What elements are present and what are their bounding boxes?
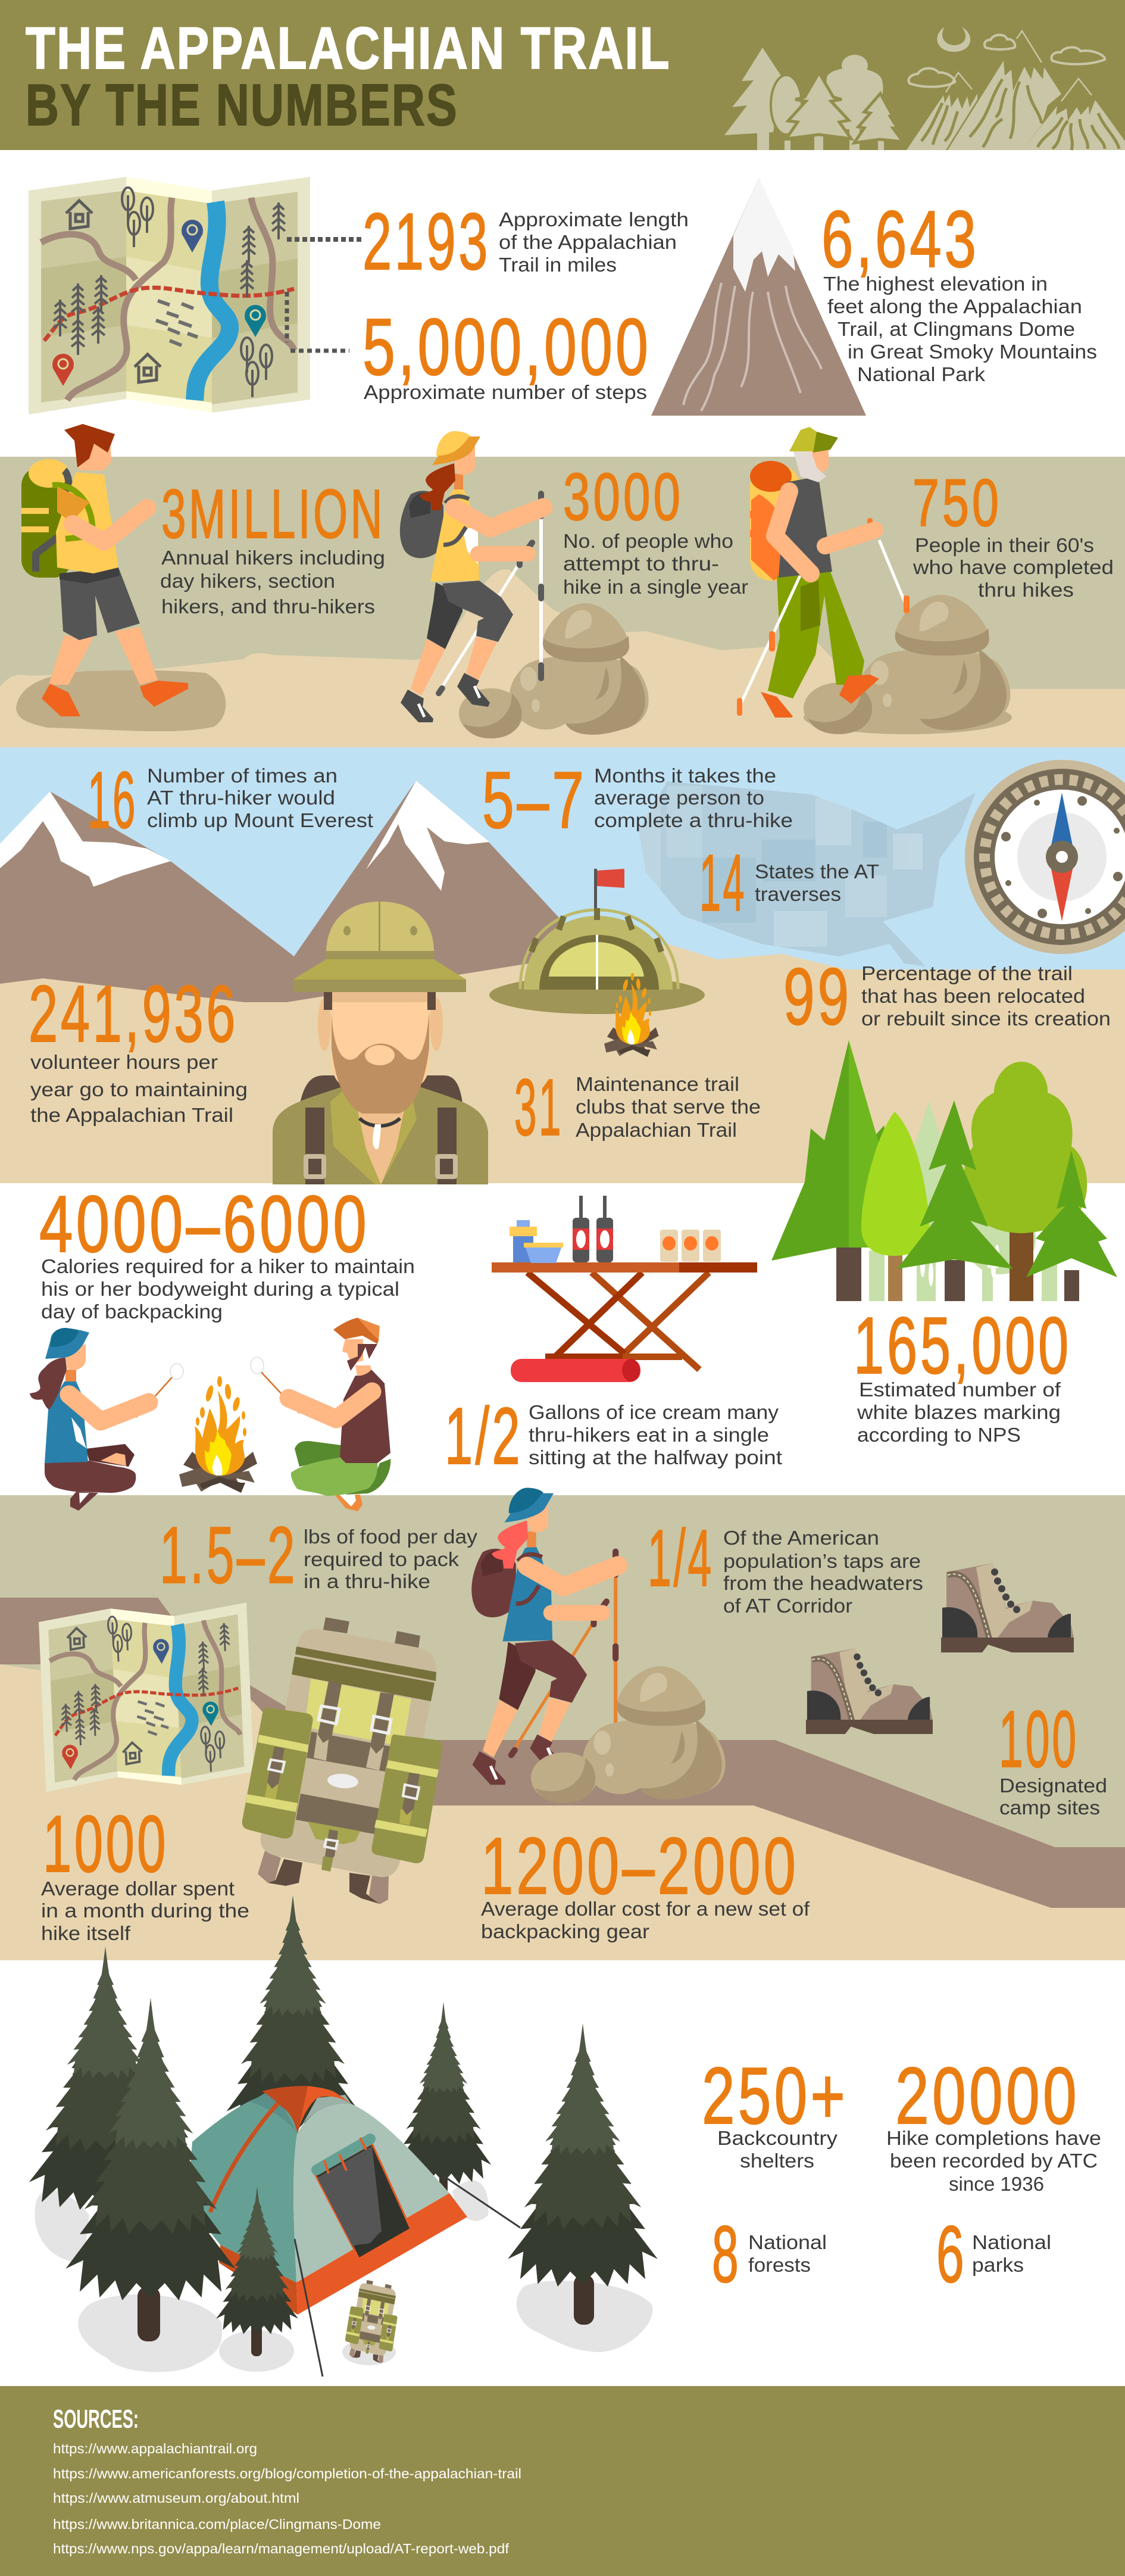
description: Maintenance trail (576, 1073, 739, 1095)
stat: 99 percent (783, 952, 1111, 1041)
description: Number of times an (147, 765, 338, 787)
description: hike in a single year (563, 576, 748, 598)
description: in Great Smoky Mountains (848, 341, 1097, 363)
description (30, 1051, 248, 1126)
description: Estimated number of (859, 1379, 1061, 1401)
description: the Appalachian Trail (30, 1104, 233, 1126)
description: Approximate length (499, 208, 689, 230)
sources list: https://www.britannica.com/place/Clingmans-Dome (53, 2516, 381, 2532)
stat: 1000 dollars per month (41, 1799, 249, 1944)
stat: 14 states (699, 838, 879, 928)
stat: 6 national parks (936, 2209, 1051, 2299)
description: Hike completions have (886, 2127, 1101, 2149)
description (857, 1379, 1061, 1446)
description: volunteer hours per (30, 1051, 218, 1073)
description: Percentage of the trail (861, 962, 1073, 984)
number: 241,936 (29, 969, 238, 1059)
description: since 1936 (949, 2173, 1044, 2195)
rock pile (531, 1666, 726, 1803)
description: day of backpacking (41, 1301, 223, 1323)
description: hike itself (41, 1922, 131, 1944)
sand ground (0, 569, 1125, 747)
number: 750 (912, 466, 1002, 540)
panel: food and calories (39, 1179, 1071, 1481)
rock pile: middle (459, 603, 649, 738)
description: of the Appalachian (499, 231, 677, 253)
figure: older hiker (737, 427, 910, 718)
description: in a thru-hike (304, 1570, 430, 1592)
stat: 20000 completions (886, 2051, 1101, 2195)
description: Trail, at Clingmans Dome (838, 318, 1075, 340)
sources heading: SOURCES: (53, 2405, 139, 2434)
number: 6,643 (821, 194, 979, 284)
description: shelters (740, 2150, 814, 2172)
icon: folded trail map (29, 177, 310, 414)
figure group: marshmallow campers (30, 1318, 390, 1511)
number: 4000–6000 (39, 1179, 370, 1269)
description: National Park (857, 363, 986, 385)
connector: map to 2193 (287, 237, 362, 242)
panel: mountains and camp scene (0, 747, 1125, 1301)
description: Trail in miles (499, 254, 617, 276)
description: feet along the Appalachian (827, 295, 1082, 317)
description: year go to maintaining (30, 1078, 248, 1100)
description: complete a thru-hike (594, 809, 793, 831)
number: 16 (88, 755, 138, 845)
stat: 16 Everests (88, 755, 373, 845)
number: 1.5–2 (160, 1510, 298, 1600)
description (481, 1898, 810, 1942)
figure: walking man (21, 424, 188, 716)
description: parks (972, 2254, 1024, 2276)
description (41, 1255, 415, 1323)
description: who have completed (912, 556, 1114, 578)
description: Of the American (723, 1527, 879, 1549)
description (723, 1527, 923, 1617)
number: 6 (936, 2209, 967, 2299)
description: sitting at the halfway point (529, 1446, 782, 1468)
description: No. of people who (563, 530, 733, 552)
description: clubs that serve the (576, 1096, 761, 1118)
description: hikers, and thru-hikers (161, 595, 375, 618)
description: People in their 60's (915, 534, 1094, 556)
figure: seated man (251, 1318, 390, 1511)
description (147, 765, 373, 831)
figure: seated woman (30, 1328, 183, 1511)
title (26, 15, 671, 138)
stat: 5-7 months (482, 755, 793, 845)
description: been recorded by ATC (890, 2150, 1098, 2172)
icon: campfire (179, 1376, 257, 1493)
panel: length and elevation (29, 177, 1097, 416)
icon: snow-capped mountain (651, 178, 866, 416)
description: or rebuilt since its creation (861, 1008, 1111, 1030)
description: Average dollar spent (41, 1878, 235, 1900)
number: 1/4 (648, 1513, 714, 1603)
icon: hiking boot small (806, 1648, 933, 1734)
description: Backcountry (717, 2127, 838, 2149)
stat: 250+ shelters (702, 2051, 848, 2172)
stat: 31 trail clubs (514, 1062, 761, 1152)
title: THE APPALACHIAN TRAIL (26, 15, 671, 81)
panel: camp in the pines (29, 1896, 1101, 2377)
number: 5–7 (482, 755, 587, 845)
number: 3000 (563, 460, 683, 534)
description: Gallons of ice cream many (529, 1401, 779, 1423)
panel: header (0, 0, 1125, 150)
sources list: https://www.nps.gov/appa/learn/management/upload/AT-report-web.pdf (53, 2541, 510, 2556)
description: according to NPS (857, 1424, 1021, 1446)
description: backpacking gear (481, 1920, 649, 1942)
description: Average dollar cost for a new set of (481, 1898, 810, 1920)
description (576, 1073, 761, 1141)
description: The highest elevation in (823, 273, 1048, 295)
background mountains (0, 781, 595, 1012)
map: United States silhouette (639, 781, 976, 966)
number: 8 (712, 2209, 741, 2299)
description (972, 2231, 1051, 2276)
number: 1/2 (445, 1391, 523, 1481)
figure: bearded explorer (273, 902, 488, 1184)
description: AT thru-hiker would (147, 787, 335, 809)
description: Appalachian Trail (576, 1119, 737, 1141)
panel: sources footer (0, 2386, 1125, 2576)
description: traverses (755, 883, 841, 905)
stat: 3000 attempts (563, 460, 748, 598)
description: of AT Corridor (723, 1595, 852, 1617)
flag on tent (594, 869, 624, 910)
description (861, 962, 1111, 1030)
description: in a month during the (41, 1900, 249, 1922)
number: 250+ (702, 2051, 848, 2141)
icon: green forest (771, 1040, 1117, 1301)
stat: 8 national forests (712, 2209, 827, 2299)
description: forests (748, 2254, 811, 2276)
stat: 5,000,000 steps (362, 302, 651, 403)
rock under hiker (16, 670, 226, 731)
description: Calories required for a hiker to maintain (41, 1255, 415, 1277)
description (499, 208, 689, 276)
icon: compass (965, 760, 1125, 954)
icon: large backpack (242, 1617, 442, 1904)
description: thru hikes (978, 579, 1074, 601)
brown trail (0, 1598, 1125, 1908)
icon: small backpack (345, 2280, 397, 2363)
sources list: https://www.americanforests.org/blog/completion-of-the-appalachian-trail (53, 2466, 521, 2481)
panel: gear and path (0, 1318, 1125, 1960)
number: 5,000,000 (362, 302, 651, 392)
description (563, 530, 748, 598)
rock pile: right (804, 595, 1012, 734)
sources list (53, 2441, 521, 2556)
description: States the AT (755, 860, 879, 882)
number: 3MILLION (161, 475, 385, 553)
icon: hiking boot (941, 1563, 1074, 1652)
sand ground (0, 944, 1125, 1183)
description (594, 765, 793, 831)
description (912, 534, 1114, 601)
description: population’s taps are (723, 1550, 921, 1572)
icon: campfire (604, 973, 659, 1057)
stat: 4000-6000 calories (39, 1179, 415, 1323)
description: his or her bodyweight during a typical (41, 1278, 399, 1300)
description: camp sites (999, 1797, 1100, 1819)
icon: folding table with food (492, 1196, 757, 1382)
description (304, 1526, 478, 1592)
stat: 100 camp sites (999, 1694, 1107, 1819)
description (529, 1401, 782, 1468)
icon: folded trail map (38, 1602, 254, 1792)
figure: woman hiker with poles (471, 1487, 618, 1785)
stat: 14 states: 14 (699, 838, 746, 928)
description: Annual hikers including (161, 547, 385, 569)
description: National (972, 2231, 1051, 2253)
stat: 6,643 feet (821, 194, 1097, 385)
description: day hikers, section (160, 570, 335, 592)
stat: 31 trail clubs: 31 (514, 1062, 563, 1152)
description (717, 2127, 838, 2172)
sources list: https://www.atmuseum.org/about.html (53, 2490, 299, 2506)
description: National (748, 2231, 827, 2253)
stat: 3 million hikers (160, 475, 385, 618)
description: from the headwaters (723, 1572, 923, 1594)
title: BY THE NUMBERS (26, 72, 458, 138)
stat: half gallon of ice cream (445, 1391, 782, 1481)
connector: map to 5,000,000 (287, 292, 349, 351)
description: Approximate number of steps (364, 381, 647, 403)
description: Months it takes the (594, 765, 776, 787)
illustration: tent among pines (29, 1896, 658, 2377)
icon: header trees and mountains silhouette (724, 27, 1125, 150)
description (886, 2127, 1101, 2195)
stat: 2193 miles (362, 197, 689, 286)
description: required to pack (304, 1548, 460, 1570)
description: climb up Mount Everest (147, 809, 373, 831)
description (755, 860, 879, 905)
sources list: https://www.appalachiantrail.org (53, 2441, 257, 2456)
description: white blazes marking (857, 1401, 1061, 1423)
description: thru-hikers eat in a single (529, 1424, 769, 1446)
description: Designated (999, 1774, 1107, 1797)
icon: dome tent (489, 908, 705, 1014)
icon: teal tent (188, 2086, 467, 2315)
stat: 1/4 of taps (648, 1513, 923, 1617)
sand ground (0, 1664, 1125, 1960)
stat: 750 in their 60s (912, 466, 1114, 601)
stat: 1200-2000 dollars gear (481, 1821, 810, 1942)
description (748, 2231, 827, 2276)
description (999, 1774, 1107, 1819)
stat: 165,000 white blazes (854, 1301, 1071, 1446)
description: average person to (594, 787, 764, 809)
stat: 1.5-2 lbs of food (160, 1510, 478, 1600)
number: 99 (783, 952, 852, 1041)
number: 1000 (43, 1799, 168, 1889)
description: that has been relocated (861, 985, 1085, 1007)
description: attempt to thru- (563, 553, 719, 575)
panel: hikers band (0, 424, 1125, 747)
description (41, 1878, 249, 1944)
number: 1200–2000 (481, 1821, 799, 1911)
stat: 241,936 volunteer hours (29, 969, 248, 1126)
number: 2193 (362, 197, 490, 286)
description (823, 273, 1097, 385)
description: lbs of food per day (304, 1526, 478, 1548)
figure: woman with trekking poles (400, 431, 544, 722)
description (160, 547, 385, 618)
